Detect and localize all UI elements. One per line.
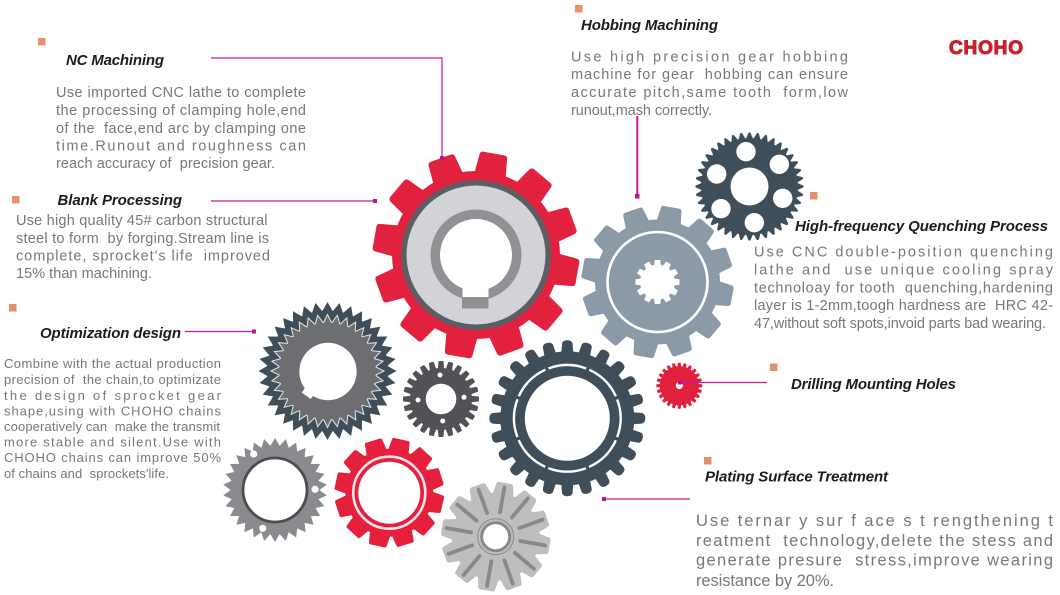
text block: plating description: generate presure stress,improve wearing (696, 552, 1053, 570)
heading: NC Machining: NC Machining (66, 52, 164, 69)
gear: blue-grey gear (569, 193, 746, 371)
text block: plating description: Use ternar y sur f ace s t rengthening t (696, 512, 1053, 530)
text block: Optimization design description: shape,using with CHOHO chains (4, 404, 222, 418)
leader line: Plating Surface Treatment (602, 497, 690, 501)
heading: High-frequency Quenching Process: High-frequency Quenching Process (795, 218, 1048, 235)
text block: NC Machining description (56, 85, 306, 172)
text block: quenching description: Use CNC double-position quenching (754, 245, 1053, 261)
gear: small red drilled gear (656, 363, 702, 409)
heading: Optimization design: Optimization design (40, 325, 181, 342)
text block: Hobbing Machining description: accurate pitch,same tooth form,low (571, 85, 849, 101)
text block: Optimization design description: Combine with the actual production (4, 356, 221, 371)
text block: plating description: reatment technology,delete the stess and (696, 532, 1053, 550)
logo: CHOHO: CHOHO (949, 38, 1023, 59)
leader line: Drilling Mounting Holes (678, 380, 767, 384)
text block: plating description (696, 512, 1053, 590)
text block: plating description: resistance by 20%. (696, 572, 834, 590)
text block: Optimization design description: more stable and silent.Use with (4, 434, 221, 450)
leader line: Optimization design (185, 330, 256, 334)
text block: quenching description: layer is 1-2mm,toogh hardness are HRC 42- (754, 298, 1053, 314)
panel: Plating Surface Treatment (696, 457, 1053, 590)
panel: Optimization design (4, 304, 222, 481)
text block: NC Machining description: of the face,end arc by clamping one (56, 121, 306, 137)
heading: Plating Surface Treatment: Plating Surface Treatment (705, 469, 889, 486)
text block: NC Machining description: the processing of clamping hole,end (56, 103, 306, 119)
text block: NC Machining description: reach accuracy of precision gear. (56, 156, 275, 172)
leader line: NC Machining (211, 58, 444, 160)
gear: dark gear with segmented white ring (489, 340, 645, 496)
text block: Optimization design description: precision of the chain,to optimizate (4, 372, 221, 387)
gear: dark sprocket with six holes (694, 131, 805, 242)
text block: Optimization design description (4, 356, 222, 481)
text block: quenching description: lathe and use unique cooling spray (754, 262, 1054, 278)
text block: Optimization design description: CHOHO chains can improve 50% (4, 450, 221, 465)
text block: quenching description (754, 245, 1054, 332)
text block: quenching description: 47,without soft spots,invoid parts bad wearing. (754, 316, 1046, 332)
text block: Hobbing Machining description: runout,mash correctly. (571, 103, 712, 119)
text block: Hobbing Machining description: machine for gear hobbing can ensure (571, 67, 848, 83)
heading: Drilling Mounting Holes: Drilling Mounting Holes (791, 376, 956, 393)
text block: Blank Processing description: complete, sprocket's life improved (16, 248, 270, 264)
leader line: Hobbing Machining (635, 116, 640, 198)
gear: small dark gear with four holes (403, 361, 479, 437)
text block: Blank Processing description: Use high quality 45# carbon structural (16, 213, 268, 229)
text block: NC Machining description: Use imported CNC lathe to complete (56, 85, 306, 101)
text block: Optimization design description: cooperatively can make the transmit (4, 419, 220, 434)
heading: Hobbing Machining: Hobbing Machining (581, 17, 718, 34)
gear: grey sprocket lower left (209, 428, 341, 552)
text block: Blank Processing description: steel to form by forging.Stream line is (16, 231, 269, 247)
text block: Optimization design description: of chains and sprockets'life. (4, 466, 169, 481)
text block: Hobbing Machining description (571, 50, 849, 119)
heading: Blank Processing: Blank Processing (58, 192, 182, 209)
gear: large sprocket with zigzag ring (253, 297, 402, 445)
gear: main red gear (357, 136, 595, 374)
panel: High-frequency Quenching Process (754, 192, 1054, 332)
gear: light grey gear with spokes (433, 474, 559, 595)
panel: Drilling Mounting Holes (770, 364, 956, 393)
text block: NC Machining description: time.Runout and roughness can (56, 138, 306, 154)
panel: Hobbing Machining (571, 5, 849, 119)
text block: Optimization design description: the design of sprocket gear (4, 388, 222, 403)
text block: Blank Processing description: 15% than machining. (16, 266, 152, 282)
text block: Blank Processing description (16, 213, 270, 282)
gear: red gear lower centre (324, 428, 454, 558)
text block: Hobbing Machining description: Use high precision gear hobbing (571, 50, 848, 66)
panel: Blank Processing (12, 192, 270, 282)
text block: quenching description: technoloay for tooth quenching,hardening (754, 280, 1053, 296)
leader line: Blank Processing (211, 199, 377, 203)
panel: NC Machining (38, 38, 306, 172)
